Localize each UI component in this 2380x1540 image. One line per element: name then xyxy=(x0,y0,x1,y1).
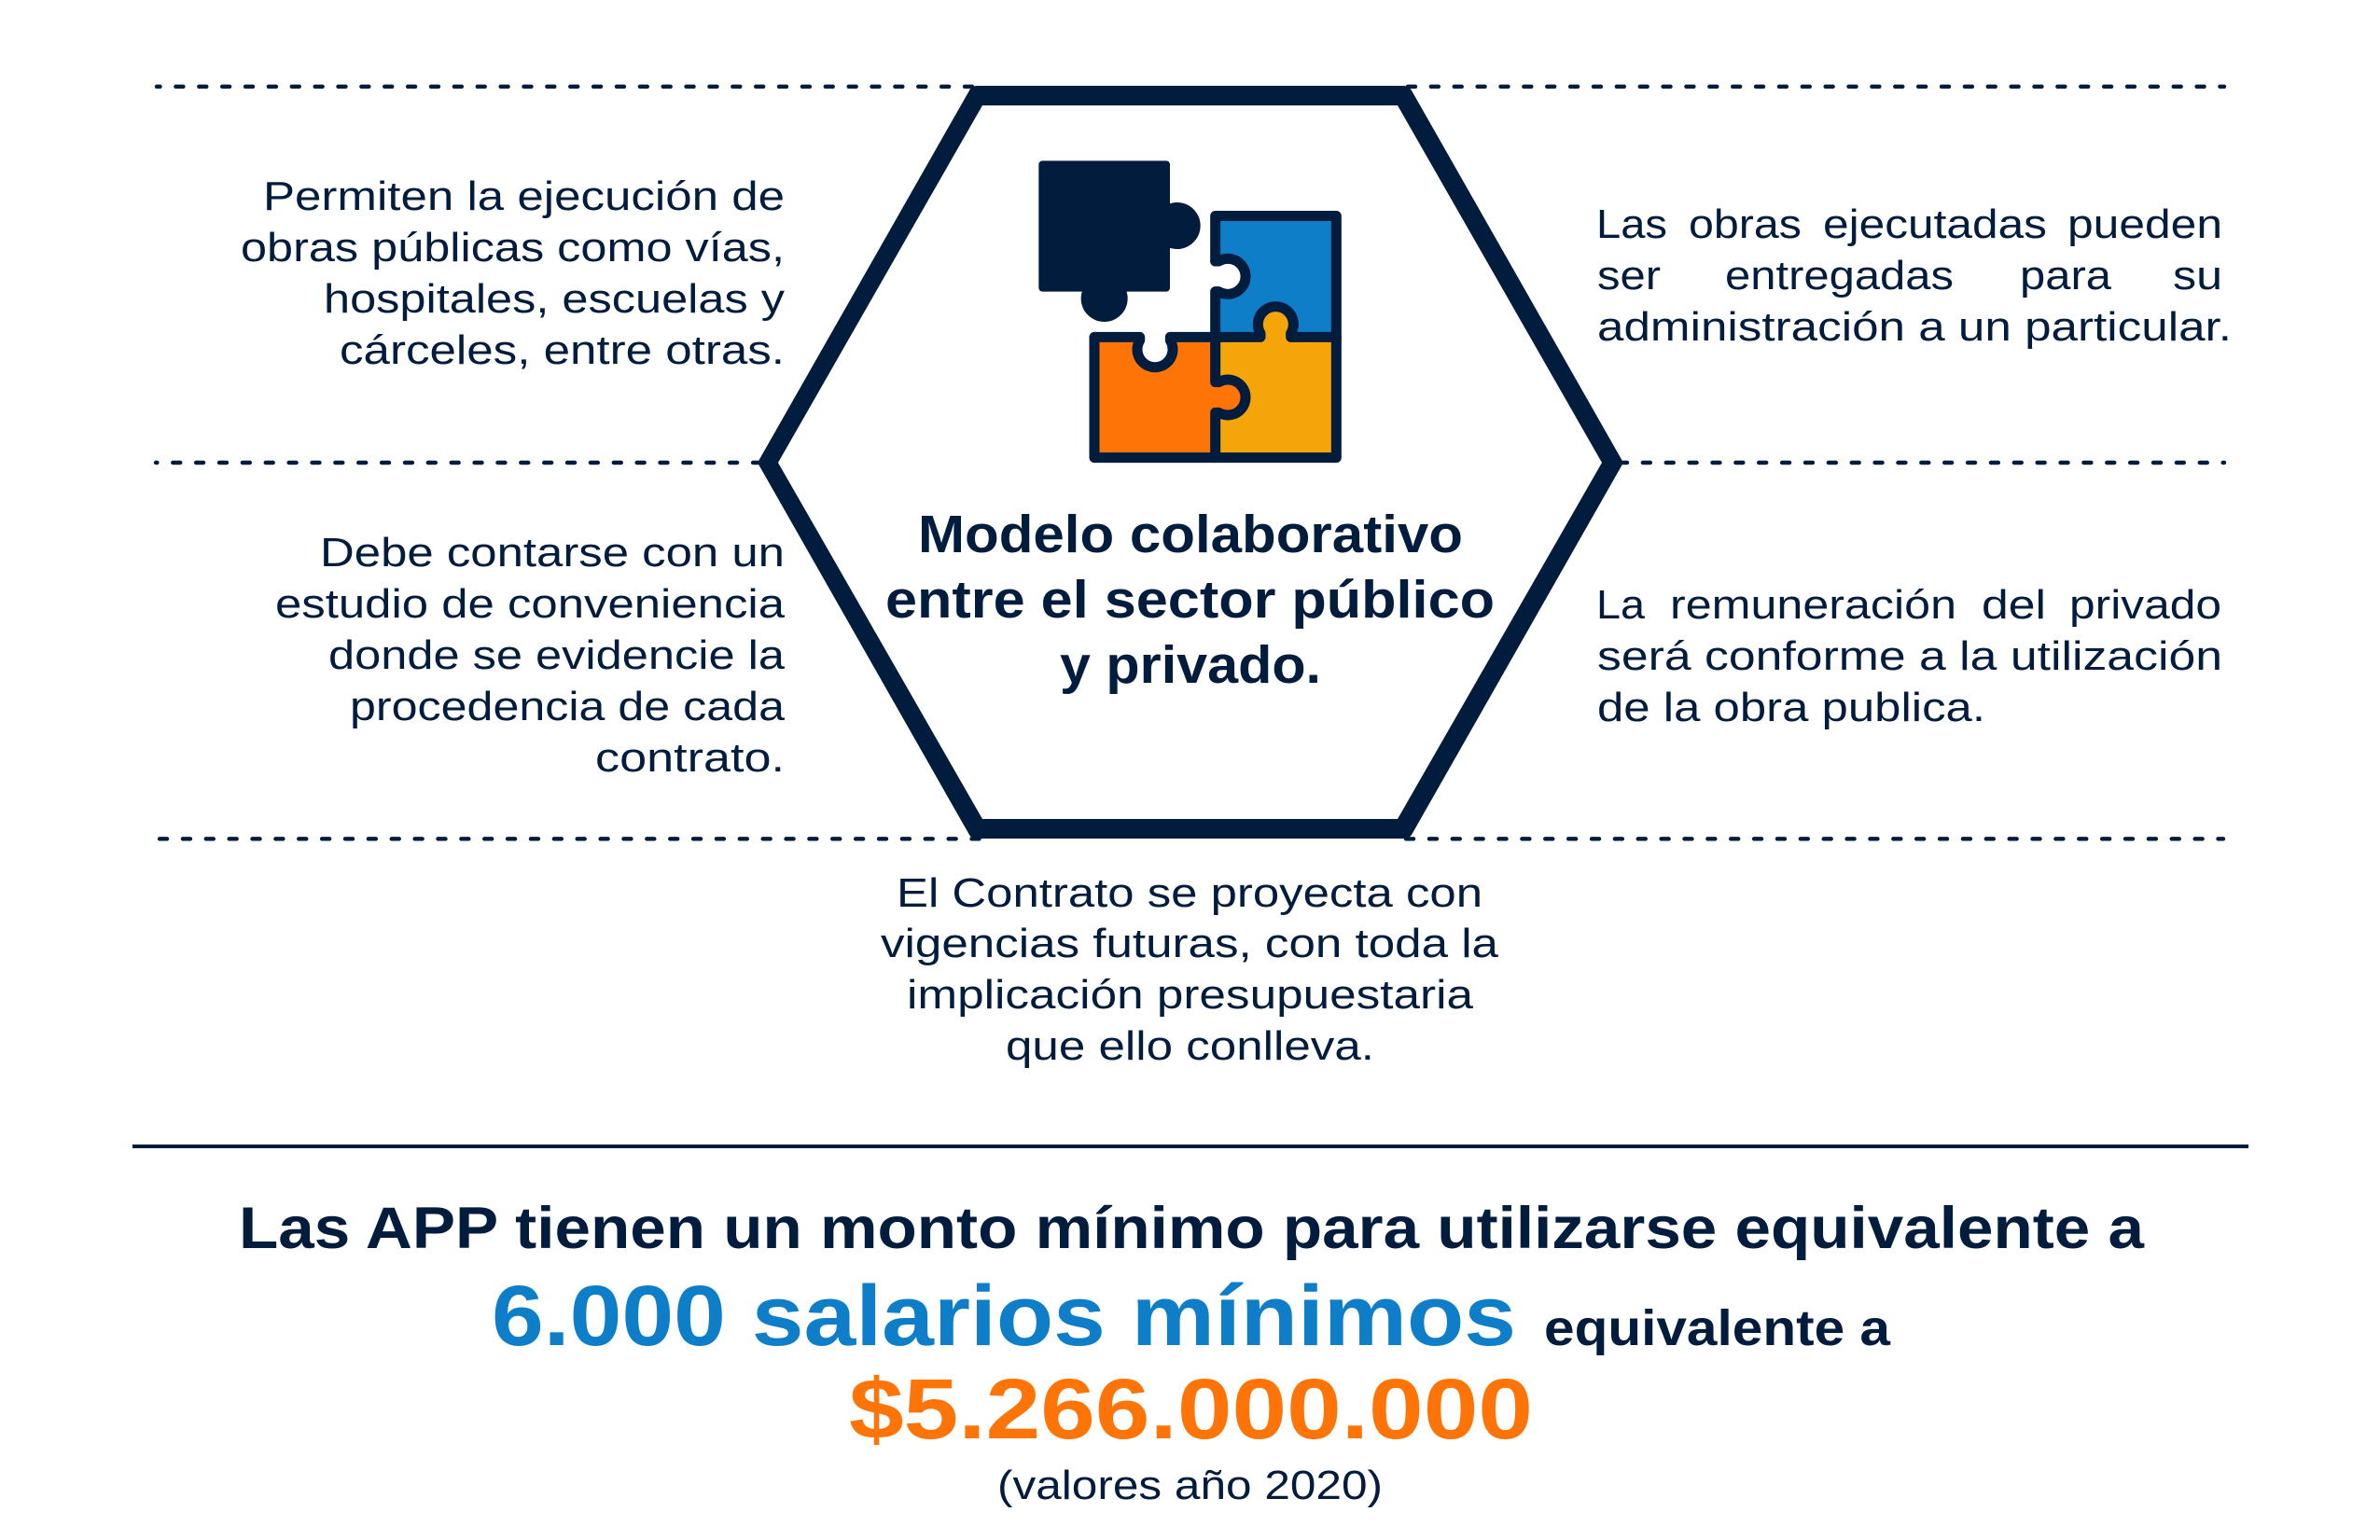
highlight: amount: $5.266.000.000 xyxy=(849,1362,1533,1457)
puzzle piece: blue xyxy=(1216,215,1336,337)
puzzle piece: orange xyxy=(1094,337,1242,458)
text block: entrega a particular: su xyxy=(2173,253,2222,298)
text block: entrega a particular: administración a un particular. xyxy=(1597,304,2232,350)
center heading: entre el sector público xyxy=(885,570,1495,630)
text block: vigencias futuras: que ello conlleva. xyxy=(1006,1023,1374,1069)
footnote: (valores año 2020) xyxy=(997,1463,1383,1508)
text block: entrega a particular xyxy=(1596,201,2232,350)
text block: obras públicas: Permiten la ejecución de xyxy=(263,173,785,219)
text block: remuneración: remuneración xyxy=(1670,582,1956,628)
text block: entrega a particular: entregadas xyxy=(1725,253,1954,298)
text block: remuneración: será conforme a la utilización xyxy=(1597,633,2222,679)
center heading: y privado. xyxy=(1060,635,1321,695)
highlight: salarios mínimos: 6.000 salarios mínimos xyxy=(492,1269,1516,1364)
text block: remuneración xyxy=(1596,582,2222,730)
text block: estudio de conveniencia: estudio de conveniencia xyxy=(275,581,786,627)
center heading: Modelo colaborativo xyxy=(918,505,1463,564)
text block: obras públicas: hospitales, escuelas y xyxy=(324,276,785,322)
equivalence label: equivalente a xyxy=(1544,1300,1891,1356)
bottom statement xyxy=(239,1196,2145,1508)
text block: vigencias futuras: implicación presupuestaria xyxy=(907,972,1474,1018)
text block: entrega a particular: ser xyxy=(1597,253,1661,298)
text block: entrega a particular: Las xyxy=(1596,201,1667,247)
puzzle piece: detached dark xyxy=(1038,160,1201,322)
puzzle piece: yellow xyxy=(1216,311,1336,458)
center heading xyxy=(885,505,1495,695)
icon: puzzle xyxy=(1038,160,1336,458)
text block: remuneración: La xyxy=(1596,582,1646,628)
text block: estudio de conveniencia: Debe contarse con un xyxy=(320,530,785,576)
text block: obras públicas: cárceles, entre otras. xyxy=(340,327,785,373)
text block: vigencias futuras xyxy=(881,870,1499,1069)
text block: remuneración: del xyxy=(1982,582,2046,628)
text block: vigencias futuras: El Contrato se proyecta con xyxy=(897,870,1482,916)
hexagon frame xyxy=(758,86,1623,839)
text block: entrega a particular: para xyxy=(2020,253,2112,298)
text block: obras públicas: obras públicas como vías, xyxy=(241,225,785,271)
text block: entrega a particular: ejecutadas xyxy=(1823,201,2047,247)
text block: estudio de conveniencia: contrato. xyxy=(595,735,785,781)
text block: vigencias futuras: vigencias futuras, con toda la xyxy=(881,921,1499,966)
text block: entrega a particular: obras xyxy=(1689,201,1802,247)
text block: entrega a particular: pueden xyxy=(2067,201,2222,247)
text block: remuneración: privado xyxy=(2069,582,2221,628)
text block: estudio de conveniencia: procedencia de cada xyxy=(350,684,786,729)
text block: estudio de conveniencia xyxy=(275,530,786,781)
text block: remuneración: de la obra publica. xyxy=(1597,685,1985,730)
text block: obras públicas xyxy=(241,173,785,373)
statement line: Las APP tienen un monto mínimo para utilizarse equivalente a xyxy=(239,1196,2145,1261)
text block: estudio de conveniencia: donde se evidencie la xyxy=(328,632,786,678)
